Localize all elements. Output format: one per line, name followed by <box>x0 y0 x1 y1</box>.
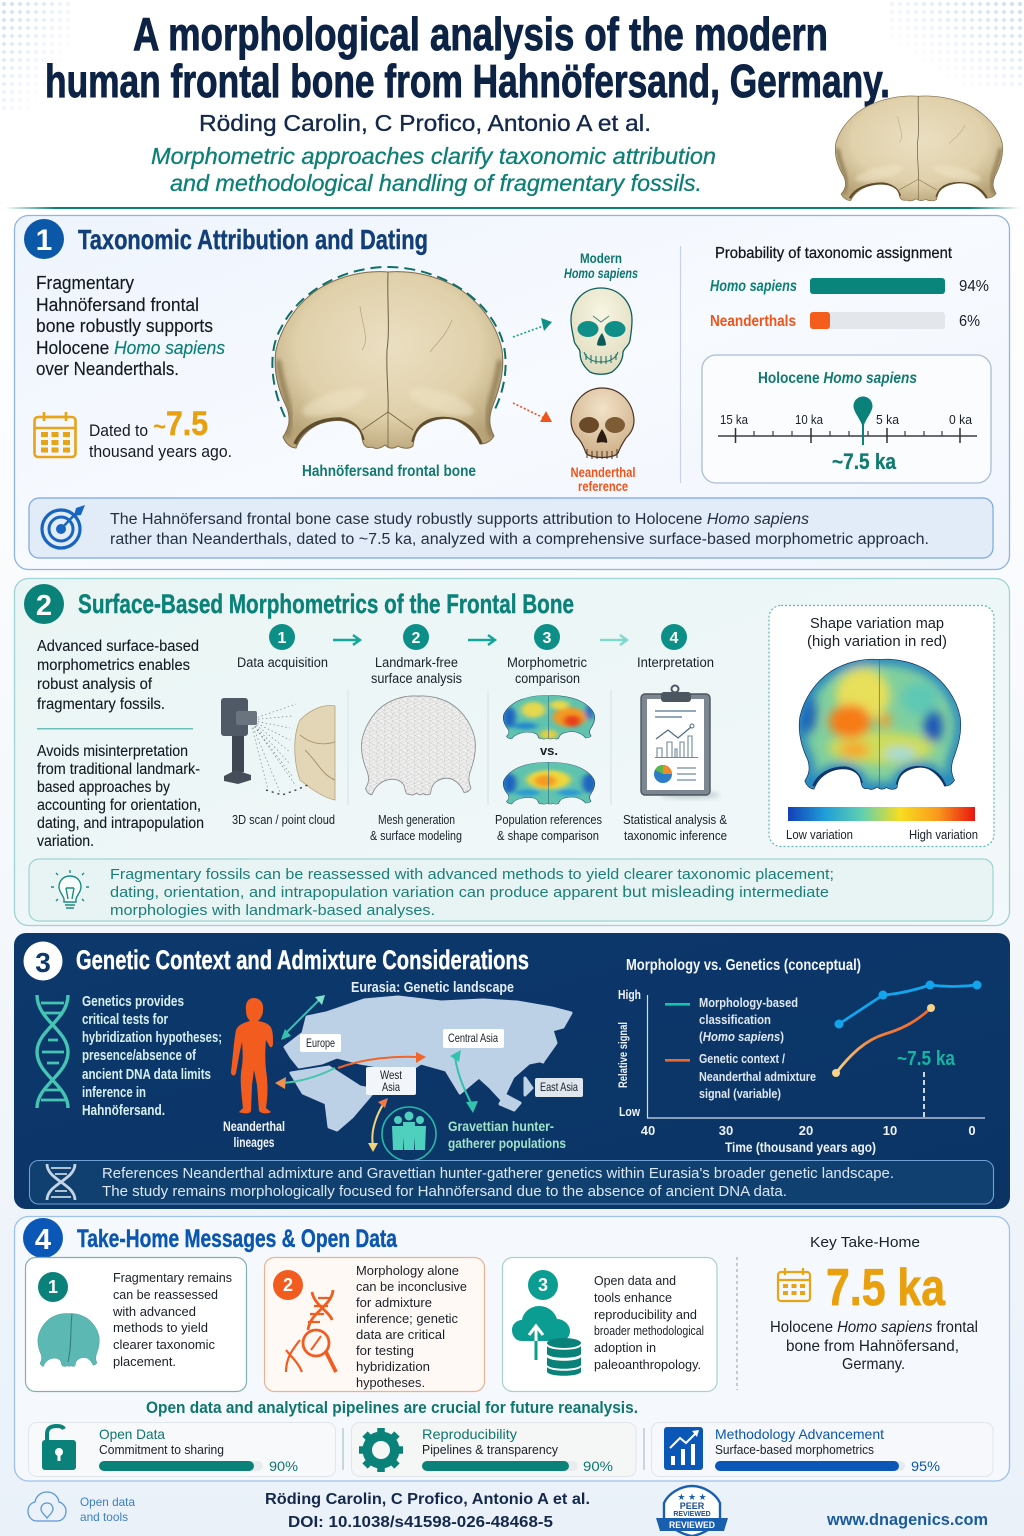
callout: section 1 conclusion: The Hahnöfersand frontal bone case study robustly supports attribution to Holocene Homo sapiens <box>110 511 809 528</box>
step labels: Data acquisition <box>237 655 328 670</box>
chart: morphology vs genetics <box>616 957 985 1155</box>
timeline box: 10 ka <box>795 412 824 427</box>
step numbers: 1 <box>278 630 287 647</box>
key take-home: bone from Hahnöfersand, <box>786 1338 959 1355</box>
subtitle: Morphometric approaches clarify taxonomic attribution <box>151 143 716 169</box>
card 2: for testing <box>356 1343 414 1358</box>
section number 2 <box>24 584 64 624</box>
shape variation map: (high variation in red) <box>807 634 947 650</box>
neanderthal reference label: reference <box>578 478 628 494</box>
chart: morphology vs genetics: Low <box>619 1104 641 1119</box>
metric: methodology advancement: Surface-based morphometrics <box>715 1443 874 1457</box>
icon: DNA with magnifier <box>286 1290 336 1372</box>
icon: modern skull <box>571 288 632 374</box>
title: A morphological analysis of the modern <box>133 8 828 60</box>
Gravettian label <box>448 1118 566 1151</box>
section number 4: 4 <box>35 1224 51 1256</box>
map labels: Europe <box>306 1036 335 1050</box>
authors: Röding Carolin, C Profico, Antonio A et al. <box>199 110 651 136</box>
map labels: West <box>380 1068 403 1082</box>
text block: misinterpretation: from traditional landmark- <box>37 761 200 778</box>
chart: morphology vs genetics: Time (thousand years ago) <box>725 1139 876 1155</box>
section number 3: 3 <box>35 947 51 978</box>
key take-home: 7.5 ka <box>826 1259 946 1317</box>
map labels: Asia <box>382 1080 400 1094</box>
chart legend: signal (variable) <box>699 1086 781 1101</box>
icon: growth chart <box>664 1427 703 1470</box>
text block: summary: Fragmentary <box>36 273 134 293</box>
card 1: can be reassessed <box>113 1287 218 1302</box>
text block: misinterpretation: Avoids misinterpretation <box>37 743 188 760</box>
card 2: Morphology alone <box>356 1263 459 1278</box>
card 1: placement. <box>113 1354 176 1369</box>
icon: target <box>42 505 85 548</box>
morphology line <box>834 980 982 1028</box>
arrow to modern skull <box>513 318 552 337</box>
open data statement: Open data and analytical pipelines are crucial for future reanalysis. <box>146 1399 638 1417</box>
map labels: East Asia <box>540 1080 578 1094</box>
illustration: mesh bone <box>362 696 475 795</box>
card 3: reproducibility and <box>594 1307 697 1322</box>
illustration captions: & shape comparison <box>497 829 599 843</box>
card 1: Fragmentary remains <box>113 1270 232 1285</box>
card 1: 1 <box>48 1277 58 1297</box>
metric: open data <box>28 1422 336 1476</box>
callout: section 2 conclusion: dating, orientation, and intrapopulation variation can produce apparent but misleading intermediate <box>110 884 829 901</box>
metric: methodology advancement <box>652 1422 993 1476</box>
icon: neanderthal skull <box>571 388 634 459</box>
text block: genetics <box>82 994 222 1119</box>
arrows between steps <box>333 635 627 645</box>
text block: summary: Hahnöfersand frontal <box>36 295 199 315</box>
dating text: thousand years ago. <box>89 442 232 461</box>
neanderthal lineages label: lineages <box>234 1135 274 1150</box>
text block: summary: bone robustly supports <box>36 316 213 336</box>
timeline box: Holocene Homo sapiens <box>758 370 917 387</box>
map labels <box>300 1029 583 1097</box>
illustration captions: taxonomic inference <box>624 829 727 843</box>
probability chart: Homo sapiens <box>710 278 797 295</box>
shape variation map <box>769 606 994 846</box>
metric: methodology advancement: Methodology Advancement <box>715 1426 884 1442</box>
probability chart: 6% <box>959 313 980 330</box>
step numbers: 4 <box>670 630 679 647</box>
section number 1 <box>24 219 64 259</box>
illustration captions: 3D scan / point cloud <box>232 813 335 827</box>
modern homo sapiens label: Homo sapiens <box>564 265 638 281</box>
text block: intro: fragmentary fossils. <box>37 696 165 713</box>
metric: open data: Open Data <box>99 1426 165 1442</box>
panel: section 4 take-home messages <box>14 1216 1010 1481</box>
text block: genetics: hybridization hypotheses; <box>82 1030 222 1046</box>
card 3: broader methodological <box>594 1323 704 1338</box>
map title: Eurasia: Genetic landscape <box>351 979 514 996</box>
icon: peer reviewed badge <box>656 1486 728 1536</box>
icon: small DNA <box>47 1164 75 1200</box>
icon: peer reviewed badge: REVIEWED <box>673 1511 711 1518</box>
map: Eurasia <box>285 997 571 1130</box>
card 2 <box>264 1258 484 1392</box>
timeline box: 5 ka <box>876 412 900 427</box>
probability chart: 94% <box>959 278 989 295</box>
icon: open lock <box>42 1426 76 1470</box>
text block: misinterpretation: dating, and intrapopulation <box>37 815 204 832</box>
timeline box: 0 ka <box>949 412 973 427</box>
chart: morphology vs genetics: 20 <box>799 1123 813 1138</box>
neanderthal reference label: Neanderthal <box>570 464 636 480</box>
timeline value: ~7.5 ka <box>832 449 897 474</box>
open data label <box>80 1495 135 1524</box>
chart: morphology vs genetics: Relative signal <box>616 1022 630 1088</box>
dating text <box>89 405 232 461</box>
illustration: colour map comparison <box>502 695 597 805</box>
colour scale legend: High variation <box>909 828 978 842</box>
text block: genetics: critical tests for <box>82 1012 168 1028</box>
icon: human figure <box>231 998 273 1113</box>
key take-home: Germany. <box>842 1356 905 1373</box>
card 3: adoption in <box>594 1340 656 1355</box>
icon: teal bone <box>38 1313 99 1367</box>
chart: morphology vs genetics: 30 <box>719 1123 733 1138</box>
card 2: hypotheses. <box>356 1375 425 1390</box>
icon: Gravettian group <box>382 1107 436 1161</box>
text block: summary: over Neanderthals. <box>36 359 179 379</box>
text block: intro: morphometrics enables <box>37 657 190 674</box>
heading: Genetic Context and Admixture Considerations <box>76 945 529 975</box>
icon: small calendar <box>778 1268 810 1301</box>
chart legend: Genetic context / <box>699 1051 785 1066</box>
icon: peer reviewed badge: ★ ★ ★ <box>677 1492 707 1502</box>
text block: misinterpretation <box>37 743 204 850</box>
probability chart <box>710 245 989 330</box>
text block: misinterpretation: based approaches by <box>37 779 170 796</box>
card 2: can be inconclusive <box>356 1279 467 1294</box>
chart: morphology vs genetics: High <box>618 987 641 1002</box>
section number 2: 2 <box>36 590 52 622</box>
title <box>45 8 890 107</box>
genetic line <box>832 1004 935 1077</box>
frontal bone illustration <box>272 267 506 448</box>
neanderthal reference label <box>570 464 636 494</box>
icon: gear <box>359 1428 403 1472</box>
chart: morphology vs genetics: 40 <box>641 1123 655 1138</box>
illustration captions: Population references <box>495 813 602 827</box>
card 2: 2 <box>283 1275 293 1295</box>
step labels: Landmark-free <box>375 655 458 670</box>
text block: genetics: Genetics provides <box>82 994 184 1010</box>
icon: light bulb <box>51 870 89 908</box>
illustration: 3D scanner and point cloud <box>221 698 335 800</box>
card 3: Open data and <box>594 1273 676 1288</box>
icon: DNA helix <box>37 995 68 1108</box>
footer <box>28 1486 988 1536</box>
illustration: colour map comparison: vs. <box>540 743 558 758</box>
step labels <box>237 655 714 686</box>
callout: section 3 conclusion: References Neanderthal admixture and Gravettian hunter-gatherer genetics within Eurasia's broader genetic landscape. <box>102 1165 894 1182</box>
callout: section 2 conclusion <box>29 859 993 921</box>
7.5 ka marker <box>897 1048 956 1118</box>
icon: peer reviewed badge: REVIEWED <box>669 1520 715 1530</box>
card 3 <box>502 1258 717 1392</box>
text block: genetics: ancient DNA data limits <box>82 1067 211 1083</box>
map arrows <box>275 995 478 1152</box>
open data label: and tools <box>80 1510 128 1524</box>
metric: open data: 90% <box>269 1458 298 1474</box>
subtitle: and methodological handling of fragmentary fossils. <box>170 170 702 196</box>
card 1 <box>26 1258 246 1392</box>
citation <box>265 1491 590 1531</box>
step labels: Morphometric <box>507 655 587 670</box>
text block: misinterpretation: variation. <box>37 833 94 850</box>
section number 3 <box>24 942 62 980</box>
callout: section 1 conclusion <box>29 498 993 558</box>
chart legend <box>665 995 816 1101</box>
7.5 ka marker: ~7.5 ka <box>897 1048 956 1070</box>
card 2: hybridization <box>356 1359 430 1374</box>
text block: genetics: presence/absence of <box>82 1048 196 1064</box>
panel: section 3 genetic context <box>14 933 1010 1209</box>
card 3: 3 <box>538 1275 548 1295</box>
dating text: 7.5 <box>166 405 208 443</box>
card 1: methods to yield <box>113 1320 208 1335</box>
text block: intro: Advanced surface-based <box>37 638 199 655</box>
card 1: with advanced <box>112 1304 196 1319</box>
neanderthal lineages label <box>223 1119 285 1150</box>
illustration: clipboard report <box>641 686 720 799</box>
metric: open data: Commitment to sharing <box>99 1443 224 1457</box>
timeline box <box>702 355 991 483</box>
callout: section 1 conclusion: rather than Neanderthals, dated to ~7.5 ka, analyzed with a comprehensive surface-based morphometric approach. <box>110 531 929 548</box>
colour bone map <box>797 658 963 792</box>
text block: intro <box>37 638 199 713</box>
icon: cloud outline <box>28 1492 66 1521</box>
step labels: comparison <box>515 671 580 686</box>
chart legend: (Homo sapiens) <box>699 1029 784 1044</box>
section number 4 <box>23 1218 63 1258</box>
text block: summary <box>36 273 225 379</box>
citation: Röding Carolin, C Profico, Antonio A et al. <box>265 1491 590 1508</box>
icon: cloud and database <box>512 1306 581 1376</box>
arrow to neanderthal skull <box>513 403 552 422</box>
chart legend: Neanderthal admixture <box>699 1069 816 1084</box>
modern homo sapiens label <box>564 250 638 281</box>
Gravettian label: Gravettian hunter- <box>448 1118 554 1134</box>
subtitle <box>151 143 716 196</box>
chart legend: classification <box>699 1012 771 1027</box>
map labels: Central Asia <box>448 1031 498 1045</box>
card 3: tools enhance <box>594 1290 672 1305</box>
key take-home: Key Take-Home <box>810 1234 920 1251</box>
icon: header frontal bone <box>835 96 1003 201</box>
colour scale legend: Low variation <box>786 828 853 842</box>
open data label: Open data <box>80 1495 135 1509</box>
step numbers <box>269 624 687 650</box>
panel: section 2 surface-based morphometrics <box>14 578 1010 926</box>
key take-home <box>770 1234 978 1373</box>
bone caption: Hahnöfersand frontal bone <box>302 463 476 480</box>
card 3: paleoanthropology. <box>594 1357 701 1372</box>
text block: summary: Holocene Homo sapiens <box>36 338 225 358</box>
chart: morphology vs genetics: 10 <box>883 1123 897 1138</box>
heading: Take-Home Messages & Open Data <box>77 1225 398 1253</box>
metric: reproducibility <box>352 1422 636 1476</box>
Gravettian label: gatherer populations <box>448 1135 566 1151</box>
probability chart: Neanderthals <box>710 313 796 330</box>
text block: genetics: inference in <box>82 1085 146 1101</box>
step labels: Interpretation <box>637 655 714 670</box>
illustration captions: Statistical analysis & <box>623 813 728 827</box>
metric: reproducibility: 90% <box>583 1458 613 1474</box>
callout: section 2 conclusion: Fragmentary fossils can be reassessed with advanced methods to yield clearer taxonomic placement; <box>110 866 834 883</box>
chart: morphology vs genetics: Morphology vs. Genetics (conceptual) <box>626 957 861 974</box>
card 2: data are critical <box>356 1327 445 1342</box>
text block: misinterpretation: accounting for orientation, <box>37 797 201 814</box>
heading: Surface-Based Morphometrics of the Frontal Bone <box>78 589 574 619</box>
metric: reproducibility: Reproducibility <box>422 1426 517 1442</box>
callout: section 3 conclusion: The study remains morphologically focused for Hahnöfersand due to the absence of ancient DNA data. <box>102 1183 787 1200</box>
callout: section 2 conclusion: morphologies with landmark-based analyses. <box>110 902 435 919</box>
dating text: Dated to <box>89 421 148 440</box>
text block: intro: robust analysis of <box>37 676 153 693</box>
step numbers: 3 <box>543 630 552 647</box>
illustration captions <box>232 813 728 843</box>
website: www.dnagenics.com <box>826 1511 988 1529</box>
dating text: ~ <box>153 411 166 441</box>
section number 1: 1 <box>36 224 52 257</box>
citation: DOI: 10.1038/s41598-026-48468-5 <box>288 1514 553 1531</box>
illustration captions: Mesh generation <box>378 813 455 827</box>
timeline box: 15 ka <box>720 412 749 427</box>
card 2: inference; genetic <box>356 1311 458 1326</box>
probability chart: Probability of taxonomic assignment <box>715 245 953 262</box>
modern homo sapiens label: Modern <box>580 250 622 266</box>
callout: section 3 conclusion <box>30 1160 994 1204</box>
metric: methodology advancement: 95% <box>911 1458 940 1474</box>
colour scale legend <box>786 807 978 842</box>
text block: genetics: Hahnöfersand. <box>82 1103 165 1119</box>
illustration captions: & surface modeling <box>370 829 462 843</box>
metric: reproducibility: Pipelines & transparency <box>422 1443 559 1457</box>
timeline marker <box>854 396 872 445</box>
chart: morphology vs genetics: 0 <box>968 1123 976 1138</box>
panel: section 1 taxonomic attribution and dating <box>14 216 1010 570</box>
heading: Taxonomic Attribution and Dating <box>78 224 428 255</box>
chart legend: Morphology-based <box>699 995 798 1010</box>
card 2: for admixture <box>356 1295 432 1310</box>
header rule <box>5 207 1020 209</box>
neanderthal lineages label: Neanderthal <box>223 1119 285 1134</box>
key take-home: Holocene Homo sapiens frontal <box>770 1319 978 1336</box>
shape variation map: Shape variation map <box>810 616 944 632</box>
card 1: clearer taxonomic <box>113 1337 215 1352</box>
icon: calendar <box>34 412 76 457</box>
step labels: surface analysis <box>371 671 462 686</box>
icon: peer reviewed badge: PEER <box>680 1501 705 1511</box>
step numbers: 2 <box>412 630 421 647</box>
